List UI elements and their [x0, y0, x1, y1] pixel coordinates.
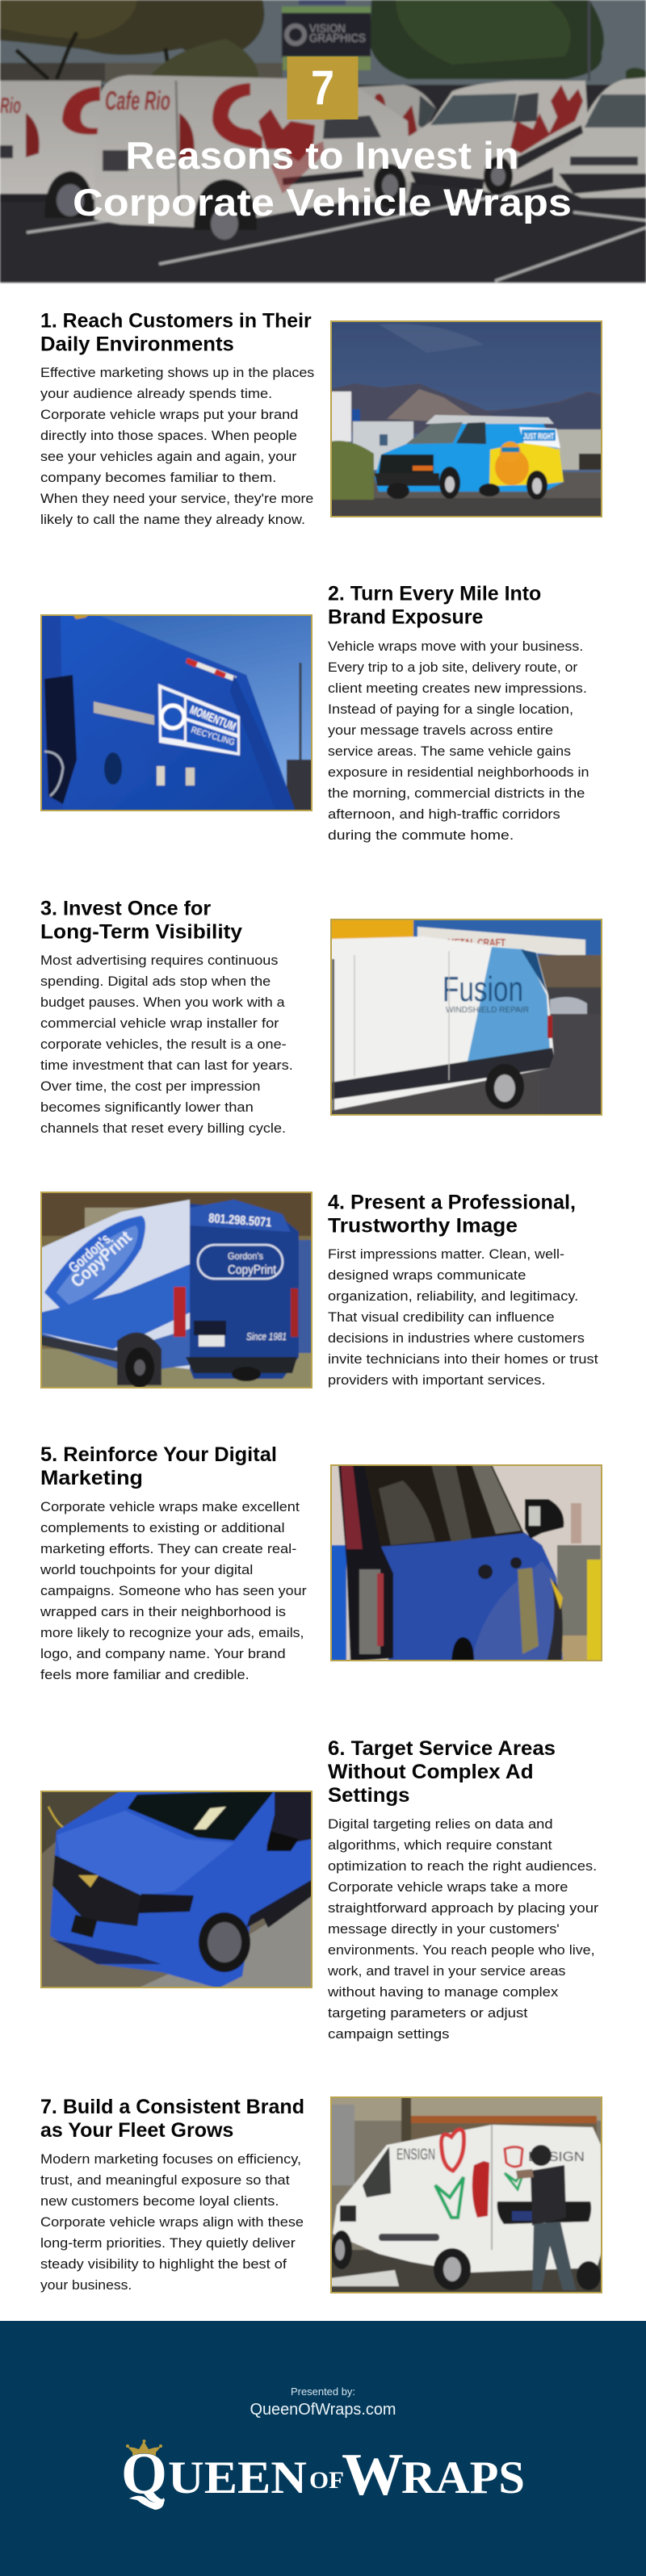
body text 7: Modern marketing focuses on efficiency, [40, 2151, 301, 2167]
photo 4: Gordon's CopyPrint van [40, 1192, 313, 1389]
body text 4: designed wraps communicate [328, 1267, 526, 1283]
heading 5 [40, 1443, 277, 1489]
body text 7: trust, and meaningful exposure so that [40, 2172, 290, 2188]
body text 7: your business. [40, 2277, 132, 2293]
van 4 [405, 81, 588, 194]
body text 3: budget pauses. When you work with a [40, 995, 285, 1010]
body text 3: Most advertising requires continuous [40, 953, 278, 968]
panel: reason 2 [40, 583, 589, 843]
panel: reason 7 [40, 2096, 602, 2293]
body text 6: environments. You reach people who live, [328, 1942, 595, 1958]
body text 1: Effective marketing shows up in the places [40, 365, 314, 380]
photo 6: blue wrapped Cadillac from above [40, 1791, 313, 1988]
logo: Queen of Wraps [121, 2440, 525, 2510]
heading 6: Without Complex Ad [328, 1761, 534, 1783]
number badge [287, 57, 359, 119]
body text 7: Corporate vehicle wraps align with these [40, 2214, 304, 2230]
photo 4: Gordon's CopyPrint van: Gordon's [228, 1250, 263, 1262]
hero photo: parked Cafe Rio vans: Rio [0, 93, 21, 118]
body text 7 [40, 2151, 304, 2293]
photo 3: white and blue windshield repair van: Fusion [443, 970, 523, 1009]
body text 2: Vehicle wraps move with your business. [328, 639, 583, 654]
body text 1: Corporate vehicle wraps put your brand [40, 407, 298, 422]
body text 5: Corporate vehicle wraps make excellent [40, 1499, 300, 1514]
website address: QueenOfWraps.com [250, 2401, 396, 2419]
main title: Corporate Vehicle Wraps [73, 181, 572, 224]
presented by label: Presented by: [291, 2385, 355, 2398]
body text 1 [40, 365, 314, 527]
body text 5: more likely to recognize your ads, emails, [40, 1625, 304, 1640]
heading 6: Settings [328, 1784, 410, 1807]
heading 7: as Your Fleet Grows [40, 2119, 233, 2142]
body text 6 [327, 1816, 599, 2042]
van 2 [94, 75, 409, 228]
photo 4: Gordon's CopyPrint van: CopyPrint [228, 1263, 276, 1277]
body text 6: work, and travel in your service areas [327, 1963, 565, 1979]
hero photo: parked Cafe Rio vans: GRAPHICS [309, 31, 366, 45]
body text 1: When they need your service, they're more [40, 491, 313, 506]
photo 3: white and blue windshield repair van: WINDSHIELD REPAIR [446, 1005, 529, 1015]
body text 7: new customers become loyal clients. [40, 2193, 279, 2209]
photo 4: Gordon's CopyPrint van: Gordon's [65, 1231, 114, 1277]
van 1 [0, 81, 101, 202]
body text 6: optimization to reach the right audiences. [328, 1858, 597, 1874]
photo 7: technician applying vinyl on white van [330, 2096, 602, 2293]
body text 7: steady visibility to highlight the best of [40, 2256, 287, 2272]
body text 2: client meeting creates new impressions. [328, 681, 587, 696]
heading 2: Brand Exposure [328, 605, 483, 628]
heading 3: Long-Term Visibility [40, 920, 242, 943]
body text 6: Digital targeting relies on data and [328, 1816, 553, 1832]
panel: reason 3 [40, 898, 602, 1136]
icon: gold crown [126, 2440, 162, 2456]
photo 4: Gordon's CopyPrint van: CopyPrint [67, 1226, 136, 1292]
body text 1: directly into those spaces. When people [40, 428, 297, 443]
heading 4: Trustworthy Image [328, 1214, 518, 1237]
body text 2: service areas. The same vehicle gains [328, 743, 571, 759]
body text 2 [328, 639, 589, 843]
heading 6 [328, 1737, 556, 1807]
body text 5: campaigns. Someone who has seen your [40, 1583, 307, 1598]
photo 1: blue and yellow wrapped van: JUST RIGHT [523, 432, 554, 442]
heading 1: Daily Environments [40, 333, 234, 355]
heading 2 [328, 583, 541, 628]
heading 1: 1. Reach Customers in Their [40, 310, 312, 333]
logo: Queen of Wraps: UEEN [168, 2452, 307, 2503]
body text 2: Every trip to a job site, delivery route, or [328, 660, 578, 675]
hero photo: parked Cafe Rio vans: VISION [309, 22, 346, 36]
logo: Queen of Wraps: W [342, 2442, 404, 2508]
parking lines [27, 184, 646, 281]
photo 3: white and blue windshield repair van [330, 919, 602, 1116]
body text 3: corporate vehicles, the result is a one- [40, 1037, 287, 1052]
body text 4: decisions in industries where customers [328, 1330, 585, 1346]
heading 2: 2. Turn Every Mile Into [328, 583, 541, 605]
heading 3 [40, 898, 242, 943]
heading 4 [328, 1192, 576, 1237]
photo 3: white and blue windshield repair van: METAL CRAFT [447, 936, 505, 949]
body text 5: wrapped cars in their neighborhood is [40, 1604, 286, 1619]
body text 7: long-term priorities. They quietly deliver [40, 2235, 296, 2251]
heading 7 [40, 2096, 304, 2142]
body text 3: Over time, the cost per impression [40, 1079, 260, 1094]
body text 1: likely to call the name they already know. [40, 512, 305, 527]
body text 2: afternoon, and high-traffic corridors [328, 806, 560, 822]
photo 4: Gordon's CopyPrint van: 801.298.5071 [208, 1212, 272, 1229]
panel: reason 1 [40, 310, 602, 527]
body text 3: commercial vehicle wrap installer for [40, 1016, 279, 1031]
photo 2: blue recycling truck: MOMENTUM [188, 703, 238, 734]
photo 1: blue and yellow wrapped van [330, 320, 602, 517]
body text 6: straightforward approach by placing your [328, 1900, 599, 1916]
heading 6: 6. Target Service Areas [328, 1737, 556, 1760]
photo 4: Gordon's CopyPrint van: Since 1981 [246, 1330, 287, 1342]
heading 1 [40, 310, 312, 355]
panel: reason 4 [40, 1192, 598, 1389]
number badge: 7 [311, 61, 334, 115]
footer band [0, 2321, 646, 2576]
body text 6: targeting parameters or adjust [328, 2005, 528, 2021]
body text 1: see your vehicles again and again, your [40, 449, 297, 464]
body text 6: algorithms, which require constant [328, 1837, 552, 1853]
heading 5: Marketing [40, 1467, 143, 1489]
main title [73, 134, 572, 224]
body text 6: campaign settings [328, 2026, 449, 2042]
photo 5: matte blue SUV side [330, 1464, 602, 1661]
body text 2: exposure in residential neighborhoods in [328, 764, 589, 780]
logo: Queen of Wraps: OF [309, 2467, 344, 2494]
body text 1: company becomes familiar to them. [40, 470, 276, 485]
panel: reason 5 [40, 1443, 602, 1682]
van 3 [355, 85, 436, 202]
rear van 5 [553, 77, 646, 198]
body text 2: Instead of paying for a single location, [328, 702, 573, 717]
body text 2: the morning, commercial districts in the [328, 785, 585, 801]
body text 6: message directly in your customers' [328, 1921, 560, 1937]
body text 4: First impressions matter. Clean, well- [328, 1246, 564, 1262]
body text 3: time investment that can last for years. [40, 1058, 293, 1073]
photo 7: technician applying vinyl on white van: ENSIGN [396, 2147, 435, 2163]
heading 7: 7. Build a Consistent Brand [40, 2096, 304, 2118]
heading 3: 3. Invest Once for [40, 898, 211, 920]
body text 3: channels that reset every billing cycle. [40, 1120, 286, 1136]
body text 5: feels more familiar and credible. [40, 1667, 250, 1682]
panel: reason 6 [40, 1737, 599, 2042]
body text 4 [328, 1246, 598, 1388]
body text 5: world touchpoints for your digital [40, 1562, 253, 1577]
body text 2: during the commute home. [328, 827, 514, 843]
body text 2: your message travels across entire [328, 723, 553, 738]
body text 4: That visual credibility can influence [328, 1309, 555, 1325]
photo 7: technician applying vinyl on white van: ENSIGN [528, 2149, 585, 2164]
body text 3: spending. Digital ads stop when the [40, 974, 271, 989]
logo: Queen of Wraps: Q [121, 2440, 167, 2506]
logo: Queen of Wraps: RAPS [401, 2452, 525, 2503]
body text 5 [40, 1499, 307, 1682]
hero photo: parked Cafe Rio vans: Cafe Rio [105, 86, 170, 115]
photo 2: blue recycling truck: RECYCLING [190, 725, 236, 748]
body text 4: invite technicians into their homes or trust [328, 1351, 598, 1367]
hero photo: parked Cafe Rio vans [0, 0, 646, 283]
hero banner [0, 0, 646, 283]
photo 2: blue recycling truck [40, 614, 313, 811]
body text 4: organization, reliability, and legitimacy. [328, 1288, 578, 1304]
body text 6: without having to manage complex [327, 1984, 559, 2000]
heading 5: 5. Reinforce Your Digital [40, 1443, 277, 1466]
body text 5: marketing efforts. They can create real- [40, 1541, 296, 1556]
body text 6: Corporate vehicle wraps take a more [328, 1879, 568, 1895]
body text 3 [40, 953, 293, 1136]
main title: Reasons to Invest in [126, 134, 518, 177]
body text 4: providers with important services. [328, 1372, 545, 1388]
heading 4: 4. Present a Professional, [328, 1192, 576, 1214]
body text 3: becomes significantly lower than [40, 1100, 254, 1115]
body text 1: your audience already spends time. [40, 386, 272, 401]
body text 5: complements to existing or additional [40, 1520, 285, 1535]
body text 5: logo, and company name. Your brand [40, 1646, 286, 1661]
